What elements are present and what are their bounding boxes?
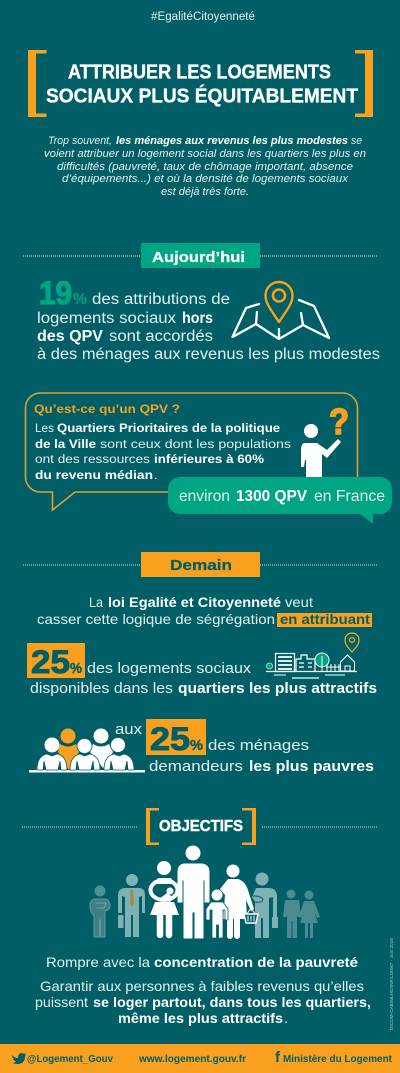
panel: what is a QPV bbox=[25, 393, 357, 510]
QPV definition: inférieures à 60% bbox=[154, 452, 264, 466]
QPV definition: du revenu médian bbox=[35, 468, 153, 482]
intro paragraph: Trop souvent, bbox=[48, 135, 112, 147]
stat: 25% housing bbox=[27, 643, 377, 697]
QPV definition: de la Ville bbox=[35, 437, 96, 451]
text: loi Egalité et Citoyenneté: en attribuant bbox=[280, 611, 370, 627]
footer: Ministère du Logement bbox=[283, 1053, 392, 1065]
text: loi Egalité et Citoyenneté: La bbox=[89, 594, 103, 610]
intro paragraph: d’équipements...) et où la densité de logements sociaux bbox=[62, 173, 348, 185]
intro paragraph: se bbox=[351, 135, 362, 147]
person: woman with baby bbox=[150, 861, 179, 935]
QPV definition: . bbox=[154, 468, 157, 482]
text: objectives bbox=[35, 954, 371, 1026]
stat: 25% housing: % bbox=[70, 660, 82, 677]
text: objectives: concentration de la pauvreté bbox=[154, 954, 358, 970]
callout: 1300 QPV: environ bbox=[179, 488, 230, 505]
icon: person with question mark bbox=[301, 401, 349, 478]
stat: 19%: logements sociaux bbox=[37, 310, 176, 327]
footer: www.logement.gouv.fr bbox=[138, 1053, 246, 1065]
stat: 25% households bbox=[115, 719, 374, 775]
heading: Objectifs: OBJECTIFS bbox=[159, 818, 243, 835]
QPV definition: Les bbox=[35, 421, 54, 435]
illustration: family and people bbox=[90, 846, 320, 938]
stat: 25% households: % bbox=[190, 737, 203, 754]
heading: Aujourd'hui bbox=[141, 243, 260, 268]
stat: 19%: % bbox=[73, 291, 87, 308]
QPV definition: ont des ressources bbox=[35, 452, 150, 466]
callout: 1300 QPV: en France bbox=[314, 488, 385, 505]
stat: 19%: hors bbox=[182, 310, 213, 327]
heading: Demain bbox=[141, 552, 260, 577]
stat: 19%: 19 bbox=[39, 275, 72, 311]
stat: 25% households: 25 bbox=[150, 721, 190, 757]
stat: 25% housing: disponibles dans les bbox=[30, 680, 173, 697]
QPV definition: Quartiers Prioritaires de la politique bbox=[57, 421, 280, 435]
icon: twitter bbox=[12, 1053, 26, 1064]
stat: 25% housing: des logements sociaux bbox=[87, 660, 252, 677]
stat: 19%: à des ménages aux revenus les plus modestes bbox=[37, 346, 380, 363]
text: objectives: Garantir aux personnes à faibles revenus qu’elles bbox=[40, 978, 364, 994]
footer: f bbox=[275, 1049, 281, 1066]
footer bbox=[0, 1044, 400, 1073]
text: objectives: Rompre avec la bbox=[46, 954, 150, 970]
text: loi Egalité et Citoyenneté: veut bbox=[285, 594, 313, 610]
title with brackets bbox=[28, 50, 373, 117]
heading: Demain: Demain bbox=[170, 557, 232, 574]
title with brackets: SOCIAUX PLUS ÉQUITABLEMENT bbox=[46, 84, 358, 108]
icon: map with pin bbox=[232, 282, 329, 339]
person: grey figure left bbox=[90, 886, 110, 937]
stat: 25% households: les plus pauvres bbox=[249, 758, 374, 775]
intro paragraph: voient attribuer un logement social dans les quartiers les plus en bbox=[44, 148, 366, 160]
stat: 25% housing: quartiers les plus attractifs bbox=[178, 680, 377, 697]
person: child bbox=[206, 890, 228, 938]
callout: 1300 QPV: 1300 QPV bbox=[236, 488, 307, 505]
person: grey couple bbox=[283, 890, 320, 938]
stat: 25% households: demandeurs bbox=[149, 758, 243, 775]
QPV definition: sont ceux dont les populations bbox=[100, 437, 291, 451]
credit: DICOM-CAB/MLHD/INF/L16067 - Juin 2016 bbox=[389, 937, 394, 1030]
person: woman with basket bbox=[220, 864, 258, 936]
stat: 19% bbox=[37, 275, 380, 363]
heading: Objectifs bbox=[146, 808, 256, 845]
person: businessman bbox=[118, 874, 145, 937]
stat: 25% housing: 25 bbox=[31, 644, 70, 680]
footer: @Logement_Gouv bbox=[27, 1053, 113, 1065]
text: loi Egalité et Citoyenneté bbox=[37, 594, 372, 627]
stat: 19%: des attributions de bbox=[92, 291, 230, 308]
intro paragraph: est déjà très forte. bbox=[161, 186, 249, 198]
intro paragraph: les ménages aux revenus les plus modestes bbox=[116, 135, 348, 147]
speech bubble outline bbox=[25, 393, 357, 510]
title with brackets: ATTRIBUER LES LOGEMENTS bbox=[68, 60, 331, 84]
text: objectives: se loger partout, dans tous les quartiers, bbox=[93, 994, 371, 1010]
text: loi Egalité et Citoyenneté: casser cette logique de ségrégation bbox=[37, 611, 275, 627]
stat: 25% households: des ménages bbox=[208, 737, 309, 754]
text: objectives: . bbox=[284, 1010, 288, 1026]
QPV definition bbox=[35, 421, 291, 482]
stat: 19%: sont accordés bbox=[109, 328, 213, 345]
icon: person with question mark: ? bbox=[329, 401, 349, 442]
person: grey man right bbox=[252, 872, 278, 938]
heading: Aujourd'hui: Aujourd’hui bbox=[152, 249, 245, 266]
hashtag: #EgalitéCitoyenneté bbox=[151, 11, 255, 23]
person: tall man bbox=[178, 846, 209, 938]
QPV heading: Qu’est-ce qu’un QPV ? bbox=[34, 402, 180, 416]
intro paragraph bbox=[44, 135, 366, 198]
text: loi Egalité et Citoyenneté: loi Egalité et Citoyenneté bbox=[108, 594, 281, 610]
stat: 19%: des QPV bbox=[37, 328, 104, 345]
callout: 1300 QPV bbox=[168, 477, 392, 524]
icon: neighbourhood bbox=[266, 633, 359, 678]
text: objectives: puissent bbox=[35, 994, 88, 1010]
stat: 25% households: aux bbox=[115, 721, 143, 738]
intro paragraph: difficultés (pauvreté, taux de chômage important, absence bbox=[57, 161, 353, 173]
icon: group of people bbox=[29, 728, 145, 772]
text: objectives: même les plus attractifs bbox=[118, 1010, 283, 1026]
